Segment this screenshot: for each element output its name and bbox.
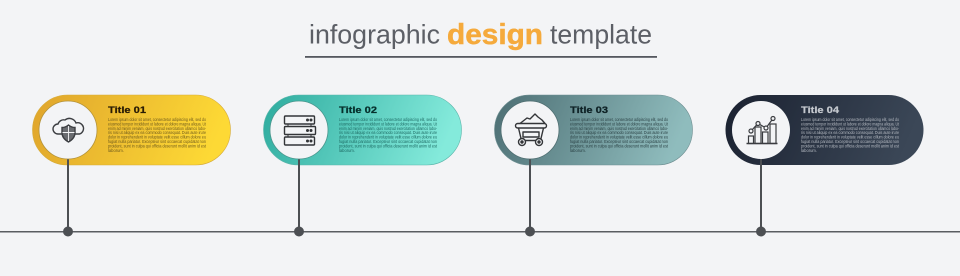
title: infographic [309,20,440,50]
text block 3: eiusmod tempor incididunt ut labore et dolore magna aliqua. Ut [570,121,669,126]
connector 1 [63,159,73,236]
step 2 [264,95,462,236]
title 02: Title 02 [339,105,377,116]
text block 4: enim ad minim veniam, quis nostrud exercitation ullamco labo- [801,126,900,131]
step 4 [726,95,924,236]
text block 4: fugiat nulla pariatur. Excepteur sint occaecat cupidatat non [801,139,900,144]
panel: step 1 card [32,95,230,165]
icon circle 2 [270,101,328,159]
text block 2: proident, sunt in culpa qui officia deserunt mollit anim id est [339,143,438,148]
text block 3: laborum. [570,148,586,153]
timeline [0,231,960,232]
text block 2: dolor in reprehenderit in voluptate velit esse cillum dolore eu [339,135,437,140]
connector 3 [525,159,535,236]
text block 2: Lorem ipsum dolor sit amet, consectetur adipiscing elit, sed do [339,117,438,122]
connector 4 [756,159,766,236]
text block 2: eiusmod tempor incididunt ut labore et dolore magna aliqua. Ut [339,121,438,126]
icon circle 3 [501,101,559,159]
text block 2: enim ad minim veniam, quis nostrud exercitation ullamco labo- [339,126,438,131]
text block 3: enim ad minim veniam, quis nostrud exercitation ullamco labo- [570,126,669,131]
text block 2: ris nisi ut aliquip ex ea commodo consequat. Duis aute irure [339,130,438,135]
title: design [447,19,543,51]
icon circle 4 [732,101,790,159]
step 1 [32,95,230,236]
text block 3: fugiat nulla pariatur. Excepteur sint occaecat cupidatat non [570,139,669,144]
text block 2 [339,117,438,153]
text block 1: ris nisi ut aliquip ex ea commodo consequat. Duis aute irure [108,130,207,135]
text block 1: dolor in reprehenderit in voluptate velit esse cillum dolore eu [108,135,206,140]
icon: cloud with shield [53,118,84,142]
icon circle 1 [39,101,97,159]
text block 2: laborum. [339,148,355,153]
text block 2: fugiat nulla pariatur. Excepteur sint occaecat cupidatat non [339,139,438,144]
panel: step 2 card [264,95,462,165]
title: template [550,20,652,50]
text block 1: Lorem ipsum dolor sit amet, consectetur adipiscing elit, sed do [108,117,207,122]
connector 2 [294,159,304,236]
step 3 [494,95,692,236]
panel: step 4 card [726,95,924,165]
text block 3: proident, sunt in culpa qui officia deserunt mollit anim id est [570,143,669,148]
title 04: Title 04 [801,105,840,116]
text block 1: eiusmod tempor incididunt ut labore et dolore magna aliqua. Ut [108,121,207,126]
text block 1: proident, sunt in culpa qui officia deserunt mollit anim id est [108,143,207,148]
title [305,19,657,58]
panel: step 3 card [494,95,692,165]
icon: mine cart [516,114,546,146]
text block 1: enim ad minim veniam, quis nostrud exercitation ullamco labo- [108,126,207,131]
text block 4: Lorem ipsum dolor sit amet, consectetur adipiscing elit, sed do [801,117,900,122]
text block 3: ris nisi ut aliquip ex ea commodo consequat. Duis aute irure [570,130,669,135]
text block 4: ris nisi ut aliquip ex ea commodo consequat. Duis aute irure [801,130,900,135]
title 01: Title 01 [108,105,147,116]
text block 4: proident, sunt in culpa qui officia deserunt mollit anim id est [801,143,900,148]
text block 1: laborum. [108,148,124,153]
text block 3: dolor in reprehenderit in voluptate velit esse cillum dolore eu [570,135,668,140]
text block 1 [108,117,207,153]
text block 3: Lorem ipsum dolor sit amet, consectetur adipiscing elit, sed do [570,117,669,122]
title 03: Title 03 [570,105,608,116]
text block 4: dolor in reprehenderit in voluptate velit esse cillum dolore eu [801,135,899,140]
text block 4 [801,117,900,153]
text block 3 [570,117,669,153]
text block 4: eiusmod tempor incididunt ut labore et dolore magna aliqua. Ut [801,121,900,126]
text block 4: laborum. [801,148,817,153]
text block 1: fugiat nulla pariatur. Excepteur sint occaecat cupidatat non [108,139,207,144]
icon: bar chart with trend line [746,116,778,144]
icon: server stack [284,116,316,145]
